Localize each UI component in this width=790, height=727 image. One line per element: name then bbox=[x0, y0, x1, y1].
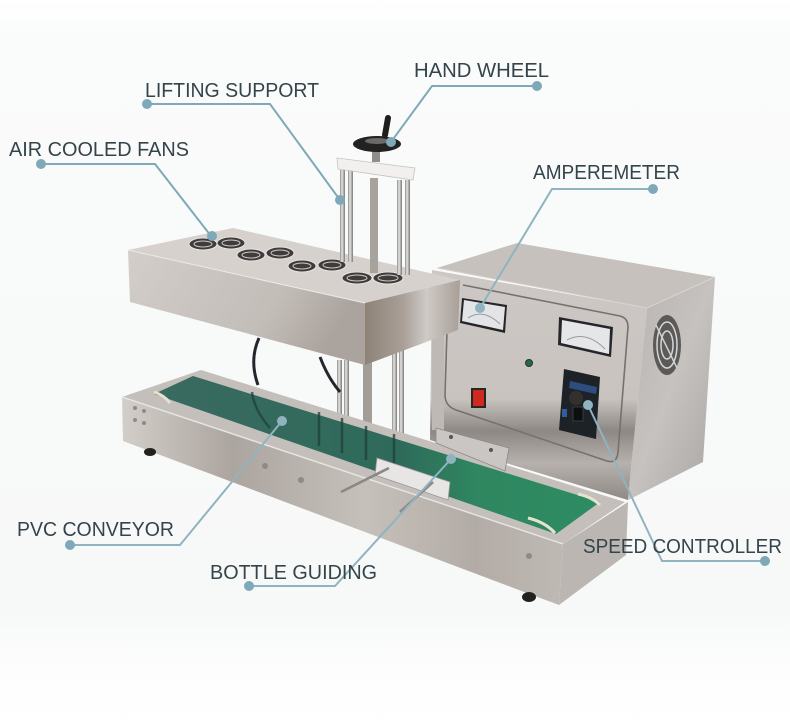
speed controller bbox=[559, 369, 600, 439]
bottle guide rails bbox=[341, 428, 509, 512]
belt reflections bbox=[252, 392, 394, 468]
hand wheel bbox=[353, 118, 401, 162]
feet bbox=[144, 448, 156, 456]
indicator lamp bbox=[526, 360, 532, 366]
label: bottle guiding: BOTTLE GUIDING bbox=[210, 562, 377, 584]
label: pvc conveyor: PVC CONVEYOR bbox=[17, 519, 174, 541]
leader: air cooled fans bbox=[36, 159, 217, 241]
machine photo illustration bbox=[122, 118, 715, 605]
cabinet bbox=[430, 243, 715, 500]
label: hand wheel: HAND WHEEL bbox=[414, 60, 549, 82]
leader: speed controller bbox=[583, 400, 770, 566]
leader: bottle guiding bbox=[244, 454, 456, 591]
callout leader lines bbox=[36, 81, 770, 591]
label: air cooled fans: AIR COOLED FANS bbox=[9, 139, 189, 161]
top box with fans bbox=[128, 228, 460, 365]
green belt bbox=[154, 376, 600, 534]
label: amperemeter: AMPEREMETER bbox=[533, 162, 680, 184]
ampere meter bbox=[460, 298, 507, 333]
leader: hand wheel bbox=[386, 81, 542, 147]
voltage meter bbox=[558, 317, 613, 357]
cable bbox=[254, 338, 340, 392]
label: lifting support: LIFTING SUPPORT bbox=[145, 80, 319, 102]
lower posts bbox=[337, 320, 444, 470]
label: speed controller: SPEED CONTROLLER bbox=[583, 536, 782, 558]
lifting support posts bbox=[337, 158, 415, 275]
side fan bbox=[653, 315, 681, 375]
leader: pvc conveyor bbox=[65, 416, 287, 550]
leader: amperemeter bbox=[475, 184, 658, 313]
power switch bbox=[471, 388, 486, 408]
fans bbox=[189, 237, 403, 284]
conveyor bbox=[122, 370, 628, 605]
leader: lifting support bbox=[142, 99, 345, 205]
